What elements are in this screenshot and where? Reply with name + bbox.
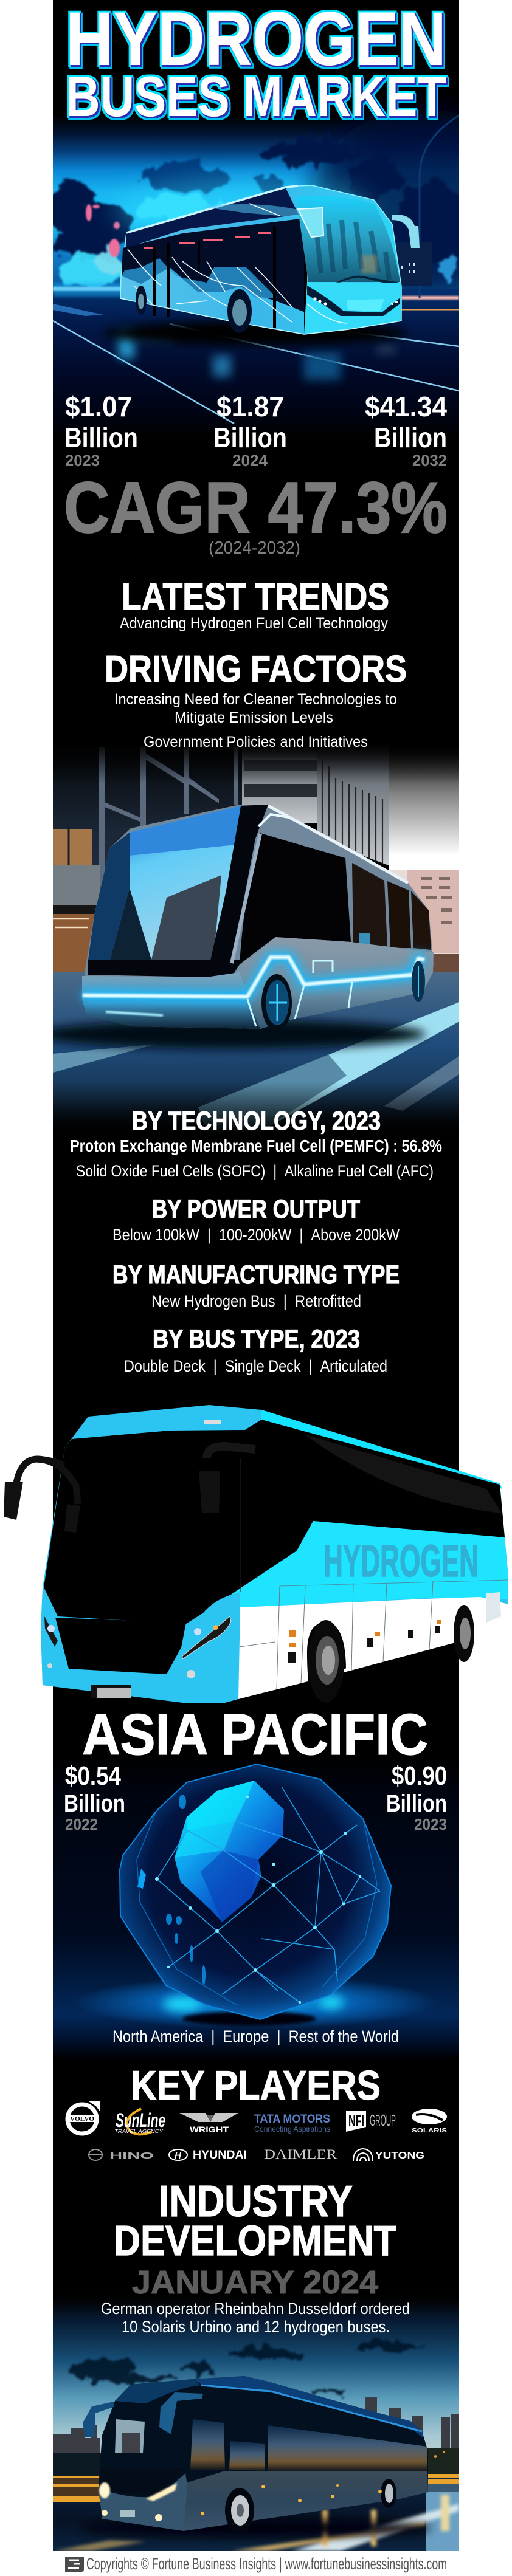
segment: by bus type: Double Deck | Single Deck | Articulated (124, 1357, 387, 1375)
segment: by technology (70, 1107, 442, 1180)
title: BUSES MARKET (66, 64, 446, 128)
driving factors: Government Policies and Initiatives (144, 733, 368, 750)
building windows (244, 760, 317, 797)
industry development: DEVELOPMENT (114, 2217, 396, 2264)
industry development: INDUSTRY (159, 2177, 353, 2226)
latest trends: LATEST TRENDS (122, 576, 389, 618)
globe illustration (53, 1756, 459, 2060)
Asia Pacific values: 2022 (65, 1815, 98, 1833)
logo: Hyundai (169, 2149, 247, 2162)
key player logos: GROUP (370, 2111, 396, 2129)
other regions: North America | Europe | Rest of the World (112, 2027, 399, 2045)
logo: Yutong (353, 2149, 424, 2161)
driving factors: DRIVING FACTORS (105, 648, 407, 690)
icon: Fortune Business Insights logo (65, 2557, 84, 2572)
segment: by technology: BY TECHNOLOGY, 2023 (132, 1107, 381, 1136)
key player logos (66, 2101, 447, 2162)
market size stats: $1.87 (216, 391, 284, 422)
market size stats: $1.07 (65, 391, 132, 422)
segment: by power output: BY POWER OUTPUT (152, 1195, 360, 1224)
logo: Daimler: DAIMLER (264, 2146, 337, 2162)
Asia Pacific values: Billion (386, 1790, 447, 1817)
market size stats: Billion (374, 422, 447, 453)
logo: Tata Motors: Connecting Aspirations (254, 2124, 330, 2134)
segment: by power output (112, 1195, 400, 1244)
bus body (36, 805, 434, 1049)
segment: by power output: Below 100kW | 100-200kW | Above 200kW (112, 1226, 400, 1244)
hero image 2: futuristic bus with light strip (36, 741, 459, 1133)
panel: black background (53, 0, 459, 2551)
Asia Pacific values: $0.54 (65, 1761, 121, 1791)
logo: Solaris (412, 2109, 447, 2134)
segment: by manufacturing type (112, 1260, 400, 1310)
coach bus illustration (4, 1405, 508, 1703)
CAGR: CAGR 47.3% (64, 467, 448, 548)
logo: SunLine: SunLine (116, 2109, 165, 2131)
market size stats: 2032 (412, 452, 447, 470)
logo: Wright: WRIGHT (190, 2124, 229, 2134)
heading: key players: KEY PLAYERS (131, 2063, 381, 2109)
segment: by bus type (124, 1325, 387, 1375)
driving factors (105, 648, 407, 750)
market size stats (64, 391, 447, 470)
logo: Hino: HINO (109, 2151, 154, 2161)
latest trends (120, 576, 389, 632)
logo: SunLine (114, 2109, 165, 2134)
logo: Hyundai: H (175, 2151, 182, 2161)
market size stats: Billion (213, 422, 287, 453)
logo: Hyundai: HYUNDAI (193, 2149, 247, 2162)
market size stats: 2023 (65, 452, 100, 470)
logo: Solaris: SOLARIS (412, 2128, 447, 2134)
Asia Pacific values: $0.90 (392, 1761, 447, 1791)
segment: by bus type: BY BUS TYPE, 2023 (153, 1325, 360, 1354)
Asia Pacific values: Billion (64, 1790, 125, 1817)
industry development: 10 Solaris Urbino and 12 hydrogen buses. (122, 2318, 390, 2336)
logo: SunLine: TRAVEL AGENCY (114, 2129, 164, 2134)
segment: by manufacturing type: BY MANUFACTURING TYPE (112, 1260, 400, 1290)
logo: Volvo (66, 2101, 100, 2134)
driving factors: Mitigate Emission Levels (175, 709, 333, 726)
logo: NFI Group: NFI (348, 2112, 364, 2130)
segment: by manufacturing type: New Hydrogen Bus | Retrofitted (151, 1292, 361, 1310)
market size stats: $41.34 (365, 391, 447, 422)
bus body (79, 2376, 432, 2537)
market size stats: Billion (64, 422, 138, 453)
logo: Tata Motors: TATA MOTORS (254, 2113, 330, 2126)
logo: Yutong: YUTONG (375, 2151, 424, 2161)
driving factors: Increasing Need for Cleaner Technologies to (114, 691, 397, 708)
logo: NFI Group (346, 2111, 396, 2132)
logo: Wright (179, 2113, 238, 2134)
segment: by technology: Solid Oxide Fuel Cells (SOFC) | Alkaline Fuel Cell (AFC) (76, 1162, 434, 1180)
logo: Volvo: VOLVO (70, 2116, 94, 2123)
title (66, 0, 446, 128)
logo: Tata Motors (254, 2113, 330, 2134)
CAGR: (2024-2032) (209, 538, 300, 558)
latest trends: Advancing Hydrogen Fuel Cell Technology (120, 615, 388, 632)
industry development: JANUARY 2024 (132, 2264, 378, 2301)
hero image: glowing bus at night (53, 100, 459, 428)
segment: by technology: Proton Exchange Membrane Fuel Cell (PEMFC) : 56.8% (70, 1136, 442, 1155)
bus body (120, 185, 420, 334)
closing image: coach at dusk (53, 2291, 459, 2551)
industry development (101, 2177, 410, 2336)
Asia Pacific values: 2023 (414, 1815, 447, 1833)
industry development: German operator Rheinbahn Dusseldorf ordered (101, 2300, 410, 2318)
heading: Asia Pacific: ASIA PACIFIC (82, 1702, 428, 1767)
market size stats: 2024 (232, 452, 268, 470)
logo: Hino (89, 2149, 154, 2161)
Asia Pacific values (64, 1761, 447, 1833)
